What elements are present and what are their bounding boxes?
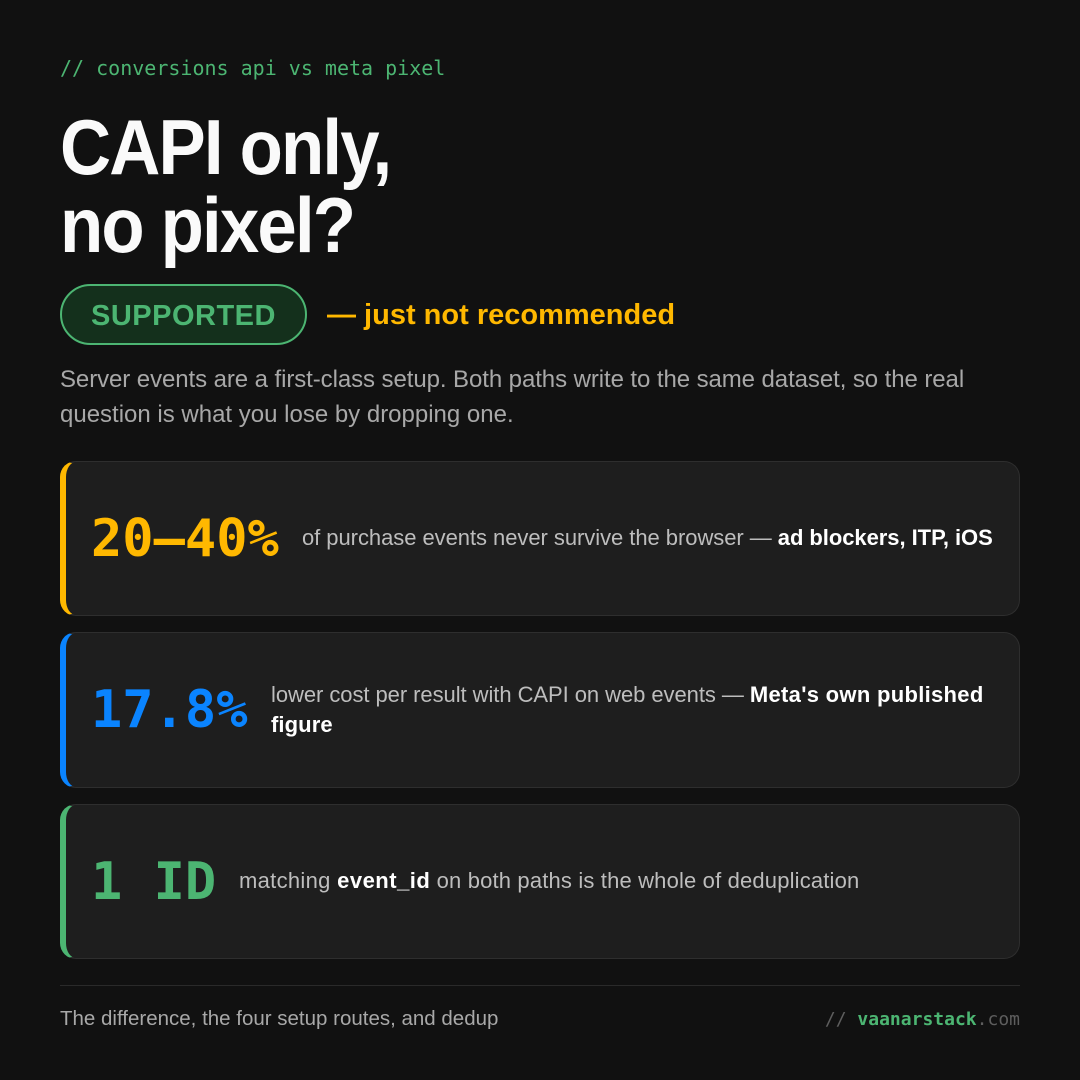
- panel: stat 1 ID: [60, 804, 1020, 959]
- stat value: 20–40%: 20–40%: [91, 509, 279, 569]
- stat description: purchase events: of purchase events never survive the browser — ad blockers, ITP, iOS: [302, 525, 993, 550]
- title: [60, 103, 390, 269]
- intro text: Server events are a first-class setup. Both paths write to the same dataset, so the real: [60, 366, 964, 393]
- title: CAPI only,: [60, 103, 390, 191]
- stat description: cost per result: [271, 682, 984, 737]
- intro text: question is what you lose by dropping one.: [60, 401, 514, 428]
- stat description: event_id: matching event_id on both paths is the whole of deduplication: [239, 868, 859, 893]
- stat description: cost per result: lower cost per result with CAPI on web events — Meta's own published: [271, 682, 984, 707]
- stat value: 17.8%: 17.8%: [91, 680, 248, 740]
- kicker: // conversions api vs meta pixel: [60, 56, 445, 80]
- badge: supported: SUPPORTED: [91, 300, 276, 332]
- badge: supported: [60, 284, 307, 345]
- subheading: — just not recommended: [327, 299, 675, 331]
- panel: stat 20–40%: [60, 461, 1020, 616]
- intro text: [60, 366, 964, 428]
- panel: stat 17.8%: [60, 632, 1020, 788]
- stat value: 1 ID: 1 ID: [91, 852, 216, 912]
- stat description: cost per result: figure: [271, 712, 333, 737]
- title: no pixel?: [60, 181, 354, 269]
- footer caption: The difference, the four setup routes, and dedup: [60, 1007, 498, 1030]
- footer brand: // vaanarstack.com: [825, 1009, 1020, 1030]
